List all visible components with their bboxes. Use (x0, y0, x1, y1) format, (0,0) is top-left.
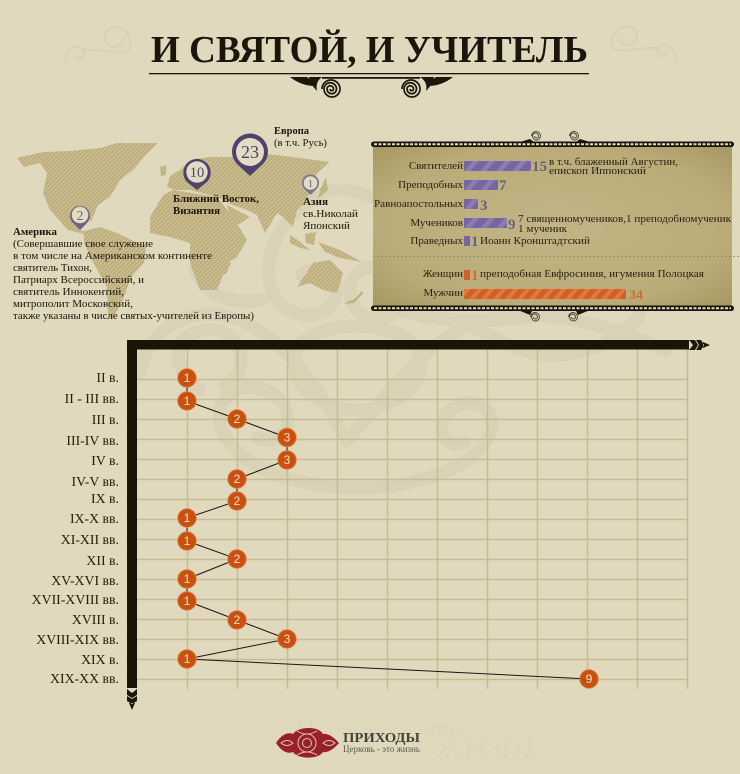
africa (150, 190, 247, 290)
pin: Европа 23: 23 (241, 142, 259, 162)
label: Америка: в том числе на Американском континенте (13, 251, 212, 262)
label: Америка: Патриарх Всероссийский, и (13, 275, 144, 286)
label: Америка: митрополит Московский, (13, 299, 133, 310)
uk (160, 165, 166, 176)
eurasia (167, 153, 330, 233)
footer watermark: Церковь - это (293, 715, 464, 740)
label: Азия: Азия (303, 197, 328, 208)
data values: 1 (184, 594, 191, 608)
label: Европа (274, 126, 327, 149)
footer watermark: ЖИЗНЬ (434, 734, 541, 765)
row: Мучеников: 1 мученик (518, 223, 568, 235)
row: Праведных: 1 (471, 234, 478, 250)
row: Святителей: 15 (532, 159, 547, 175)
data values: 2 (234, 494, 241, 508)
row: Женщин (423, 268, 704, 284)
row: Преподобных: 7 (499, 178, 507, 194)
data values: 1 (184, 534, 191, 548)
century labels: XII в. (86, 553, 119, 568)
data values: 3 (284, 453, 291, 467)
century labels: XVII-XVIII вв. (32, 592, 119, 607)
data values: 2 (234, 613, 241, 627)
title underline (149, 73, 589, 74)
row: Святителей: Святителей (409, 160, 463, 172)
row: Преподобных (398, 178, 507, 194)
rope top (371, 142, 734, 147)
indonesia (290, 232, 362, 262)
data values: 2 (234, 412, 241, 426)
pin: Ближний Восток 10: 10 (190, 165, 204, 181)
data values: 1 (184, 371, 191, 385)
new zealand (343, 291, 363, 304)
data values: 2 (234, 472, 241, 486)
panel bottom ornament (518, 310, 590, 321)
label: Америка: святитель Тихон, (13, 263, 92, 274)
arrow: horizontal axis (689, 340, 710, 350)
century labels: XIX в. (81, 652, 119, 667)
century labels: II в. (96, 370, 119, 385)
australia (297, 260, 343, 293)
title ornament (290, 77, 453, 97)
data values: 3 (284, 632, 291, 646)
background ornament (140, 190, 665, 488)
pin: Азия 1 (302, 174, 319, 195)
label: Азия: св.Николай (303, 209, 358, 220)
label: Америка: святитель Иннокентий, (13, 287, 124, 298)
madagascar (221, 262, 231, 274)
row: Праведных: Праведных (410, 235, 463, 247)
data values: 3 (284, 430, 291, 444)
row: Мучеников: 9 (508, 217, 516, 233)
world map (17, 143, 363, 319)
label: Америка: Америка (13, 227, 58, 238)
century labels: XIX-XX вв. (50, 671, 119, 686)
data values: 9 (586, 672, 593, 686)
arabia (227, 205, 250, 228)
century labels: IV-V вв. (71, 474, 119, 489)
row: Мучеников: 7 священномучеников,1 преподобномученик (518, 213, 732, 225)
row: Мучеников (410, 213, 732, 235)
axes (127, 340, 689, 688)
data values: 1 (184, 394, 191, 408)
data points (178, 369, 598, 688)
label: Европа: Европа (274, 126, 309, 137)
row: Мучеников: Мучеников (410, 217, 463, 229)
label: Америка: (Совершавшие свое служение (13, 239, 153, 250)
row: Женщин: преподобная Евфросиния, игумения Полоцкая (480, 268, 704, 280)
label: Америка (13, 227, 255, 322)
row: Равноапостольных: Равноапостольных (374, 198, 463, 210)
data values: 1 (184, 652, 191, 666)
flourish right (611, 26, 675, 60)
century labels: IX в. (91, 491, 119, 506)
century labels: XVIII-XIX вв. (36, 632, 119, 647)
row: Праведных: Иоанн Кронштадтский (480, 235, 590, 247)
pin: Америка 2 (70, 206, 90, 230)
row: Праведных (410, 234, 590, 250)
data values: 1 (184, 511, 191, 525)
data values: 1 (184, 572, 191, 586)
row: Мужчин (424, 287, 643, 303)
title: И СВЯТОЙ, И УЧИТЕЛЬ (151, 29, 588, 71)
row: Святителей: в т.ч. блаженный Августин, (549, 156, 678, 168)
flourish left (66, 27, 131, 62)
logo text (343, 731, 420, 754)
footer watermark (293, 715, 541, 765)
pin: Европа 23 (232, 134, 268, 176)
century labels: XV-XVI вв. (51, 573, 119, 588)
panel: categories (371, 132, 740, 321)
century labels (32, 370, 119, 686)
century labels: IV в. (91, 453, 119, 468)
century labels: III в. (92, 412, 119, 427)
row: Святителей (409, 156, 678, 177)
japan (318, 177, 328, 199)
century labels: XVIII в. (72, 612, 119, 627)
century labels: II - III вв. (65, 391, 119, 406)
data values: 2 (234, 552, 241, 566)
row: Мужчин: 34 (629, 288, 643, 303)
grid (137, 349, 688, 689)
logo ornament (276, 728, 339, 758)
row: Женщин: 1 (471, 268, 478, 284)
label: Ближний Восток: Ближний Восток, (173, 194, 259, 205)
pin: Америка 2: 2 (77, 208, 83, 223)
row: Женщин: Женщин (423, 268, 463, 280)
label: Азия: Японский (303, 221, 350, 232)
century labels: III-IV вв. (66, 433, 119, 448)
logo text: Церковь - это жизнь (343, 744, 420, 754)
arrow: vertical axis (127, 689, 137, 710)
label: Америка: также указаны в числе святых-учителей из Европы) (13, 311, 255, 322)
pin: Ближний Восток 10 (183, 159, 211, 190)
century labels: IX-X вв. (70, 511, 119, 526)
row: Мужчин: Мужчин (424, 287, 463, 299)
row: Святителей: епископ Иппонский (549, 165, 646, 177)
century labels: XI-XII вв. (61, 532, 119, 547)
south america (84, 227, 146, 319)
pin: Азия 1: 1 (308, 178, 313, 190)
label: Ближний Восток (173, 194, 259, 217)
chart: saints by century (32, 340, 710, 710)
north america and greenland (17, 143, 158, 234)
connecting line (187, 378, 589, 679)
logo text: ПРИХОДЫ (343, 731, 420, 746)
panel top ornament (520, 132, 590, 142)
row: Равноапостольных (374, 198, 488, 214)
row: Преподобных: Преподобных (398, 179, 463, 191)
row: Равноапостольных: 3 (480, 198, 488, 214)
label: Европа: (в т.ч. Русь) (274, 138, 327, 149)
rope bottom (371, 306, 734, 311)
label: Ближний Восток: Византия (173, 206, 220, 217)
data values (184, 371, 593, 686)
label: Азия (303, 197, 358, 232)
